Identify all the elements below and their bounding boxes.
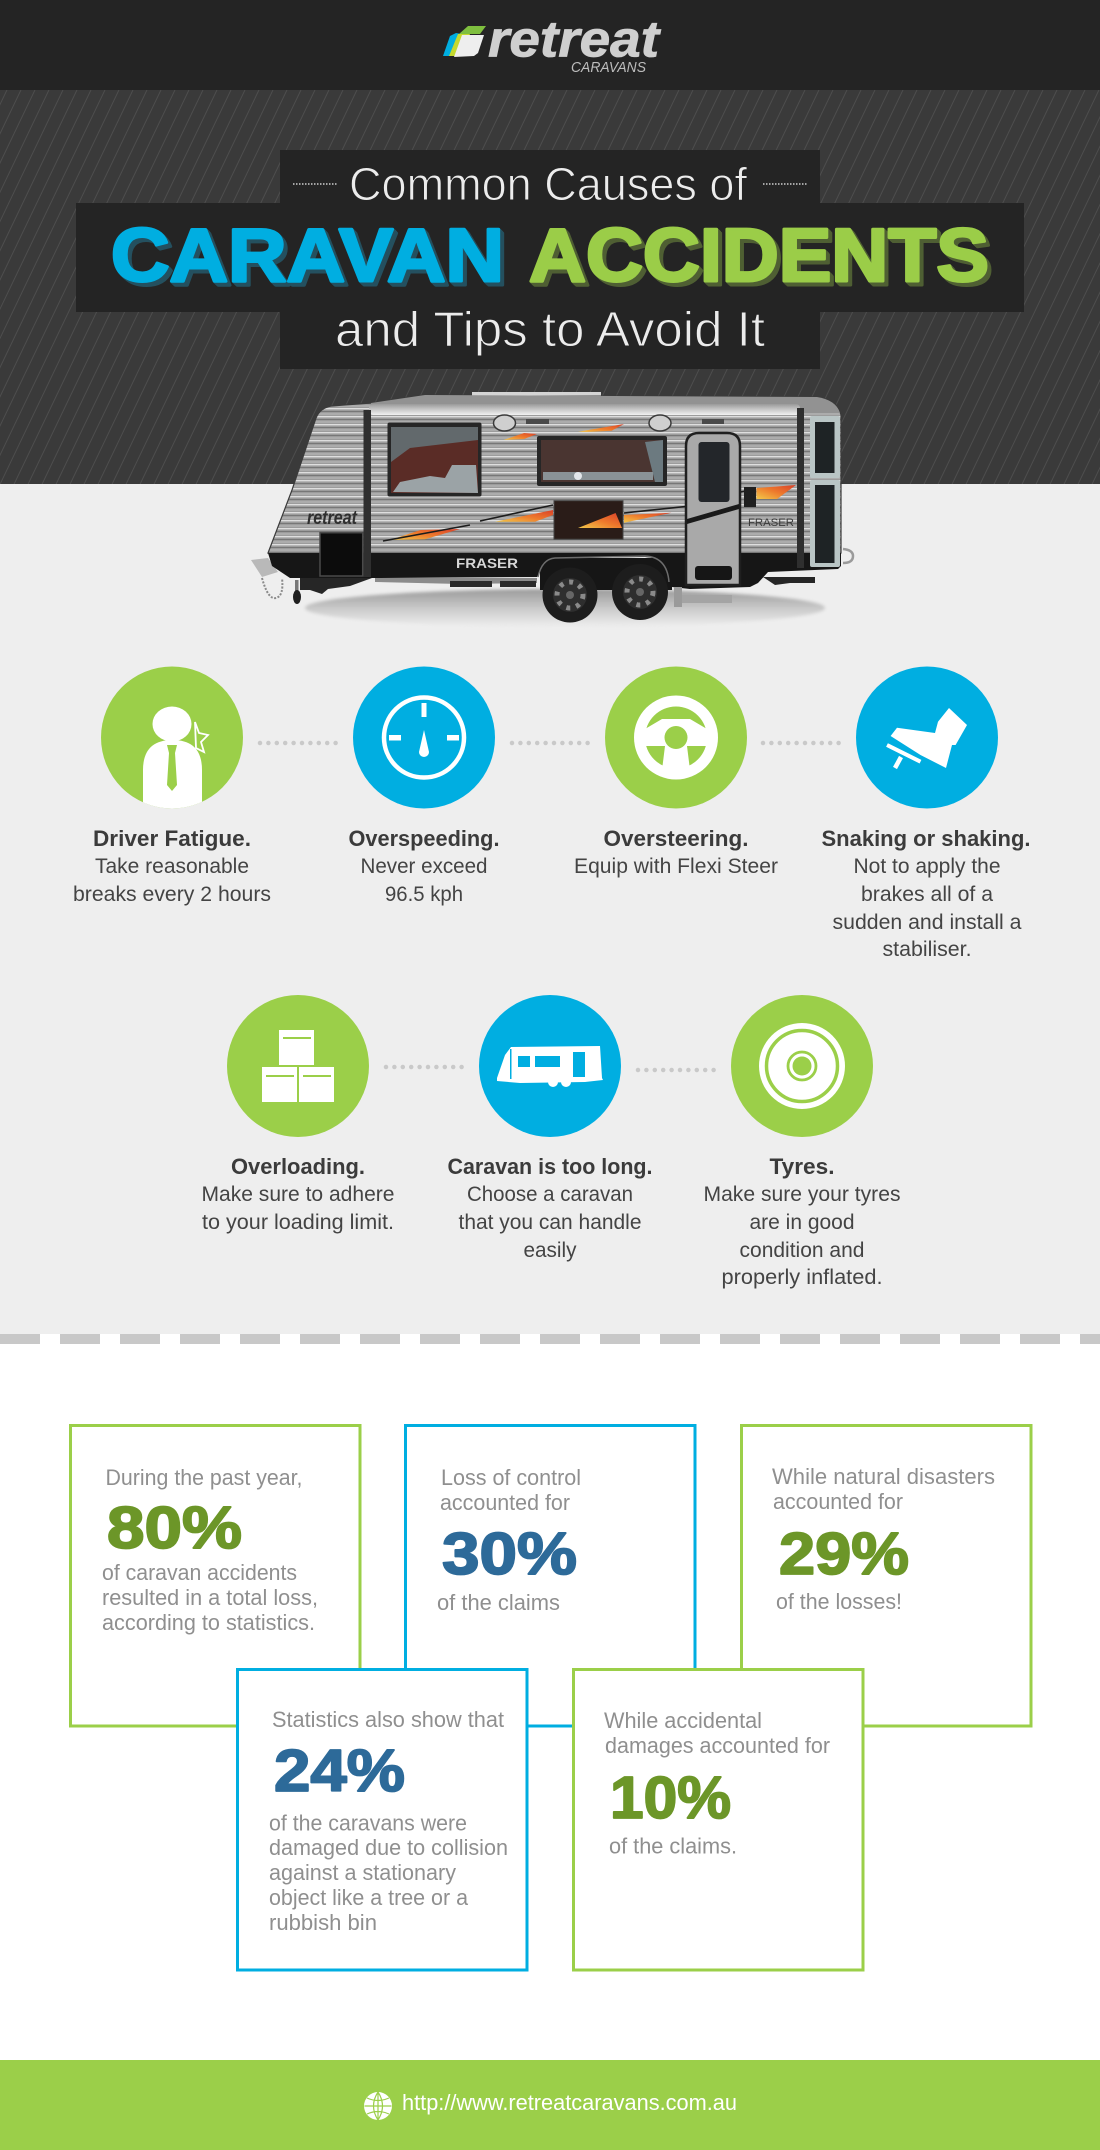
heading: Caravan is too long. <box>448 1154 652 1179</box>
window 1 <box>388 422 482 496</box>
stat: 24%: 24% <box>274 1738 405 1804</box>
stat box: 10% <box>574 1670 863 1970</box>
stat box: 24% <box>238 1670 527 1970</box>
cause: caravan is too long <box>448 995 652 1262</box>
tip text: brakes all of a <box>861 882 993 906</box>
stat box: 30% <box>406 1426 695 1726</box>
tip text: Choose a caravan <box>467 1182 633 1206</box>
stat box: 24%: of the caravans were <box>269 1810 467 1836</box>
icon: caravan silhouette <box>479 995 621 1137</box>
wheel arch trim <box>538 556 669 582</box>
icon: globe <box>364 2092 392 2120</box>
header bar <box>0 0 1100 90</box>
icon: foot on brake pedal <box>856 666 998 808</box>
rear wheel <box>612 564 668 620</box>
heading: Tyres. <box>770 1154 834 1179</box>
caravan body <box>268 395 841 553</box>
tow hitch <box>251 558 537 604</box>
tip text: to your loading limit. <box>202 1210 394 1234</box>
roof details <box>472 392 601 396</box>
caravan illustration <box>251 392 853 627</box>
stat box: 30%: of the claims <box>437 1590 560 1615</box>
tip text: easily <box>524 1238 577 1262</box>
title line 3: and Tips to Avoid It <box>335 303 765 357</box>
roof panel <box>369 395 840 413</box>
lower black skirt <box>268 553 841 589</box>
footer bar <box>0 2060 1100 2150</box>
logo: retreat caravans: CARAVANS <box>571 59 646 76</box>
caravan door <box>686 433 756 585</box>
stat box: 80%: of caravan accidents <box>102 1560 297 1585</box>
tip text: Make sure to adhere <box>202 1182 394 1206</box>
heading: Driver Fatigue. <box>93 826 251 851</box>
stat box: 30%: Loss of control <box>441 1465 581 1490</box>
title panel <box>76 150 1024 369</box>
tip text: breaks every 2 hours <box>73 882 271 906</box>
heading: Oversteering. <box>604 826 748 851</box>
tip text: 96.5 kph <box>385 882 463 906</box>
stat box: 80%: During the past year, <box>106 1465 302 1490</box>
title line 1: Common Causes of <box>349 158 747 210</box>
icon: tyre <box>731 995 873 1137</box>
stat box: 24%: object like a tree or a <box>269 1885 469 1910</box>
ground shadow <box>305 589 825 627</box>
stat box: 24%: damaged due to collision <box>269 1835 508 1860</box>
stat box: 29%: While natural disasters <box>772 1464 995 1489</box>
badge: fraser rear: FRASER <box>748 517 794 529</box>
stat: 10%: 10% <box>610 1765 731 1831</box>
rear compartments <box>810 416 853 567</box>
stat box: 29%: accounted for <box>773 1489 903 1514</box>
wheel well <box>540 558 672 590</box>
connector dots <box>638 1068 714 1072</box>
logo: retreat caravans <box>443 10 661 76</box>
tip text: sudden and install a <box>832 910 1022 934</box>
front wheel <box>542 568 598 622</box>
heading: Snaking or shaking. <box>822 826 1030 851</box>
cause: overloading <box>202 995 394 1234</box>
decals <box>383 424 796 541</box>
connector dots <box>386 1065 462 1069</box>
heading: Overloading. <box>231 1154 365 1179</box>
tip text: Make sure your tyres <box>704 1182 900 1206</box>
tip text: that you can handle <box>458 1210 642 1234</box>
stat box: 29% <box>742 1426 1031 1726</box>
stat box: 30%: accounted for <box>440 1490 570 1515</box>
tip text: stabiliser. <box>882 937 972 961</box>
tip text <box>73 854 271 906</box>
tip text: are in good <box>750 1210 854 1234</box>
centre hatch <box>554 501 623 539</box>
tip text <box>458 1182 642 1262</box>
cause: oversteering <box>574 666 778 878</box>
tip text <box>202 1182 394 1234</box>
tip text: Take reasonable <box>95 854 249 878</box>
connector dots <box>512 741 588 745</box>
rear stabiliser <box>763 577 815 585</box>
icon: stacked boxes <box>227 995 369 1137</box>
tip text <box>360 854 488 906</box>
connector dots <box>260 741 336 745</box>
left awning arm <box>364 410 371 577</box>
step and mudflap <box>674 587 732 607</box>
vents <box>494 415 724 431</box>
tip text <box>832 854 1022 961</box>
stat box: 24%: rubbish bin <box>269 1910 377 1935</box>
website url: http://www.retreatcaravans.com.au <box>402 2090 737 2115</box>
stat: 80%: 80% <box>107 1495 242 1561</box>
stat box: 29%: of the losses! <box>776 1589 902 1614</box>
heading: Overspeeding. <box>348 826 500 851</box>
tip text <box>704 1182 900 1289</box>
icon: steering wheel <box>605 666 747 808</box>
tip text: condition and <box>740 1238 864 1262</box>
stat box: 10%: of the claims. <box>609 1834 737 1858</box>
stat: 30%: 30% <box>442 1521 577 1587</box>
stat: 29%: 29% <box>779 1521 909 1587</box>
cause: snaking or shaking <box>822 666 1030 961</box>
stat box: 24%: Statistics also show that <box>272 1707 504 1732</box>
stat box: 80%: according to statistics. <box>102 1610 315 1635</box>
right awning arm <box>797 408 804 568</box>
cause: overspeeding <box>348 666 500 906</box>
front hatch <box>320 533 363 576</box>
tip text: properly inflated. <box>722 1265 882 1289</box>
stat box: 80% <box>70 1426 360 1726</box>
cause: tyres <box>704 995 900 1289</box>
stat box: 10%: While accidental <box>604 1708 762 1733</box>
light grey section background <box>0 484 1100 1334</box>
title: caravan: CARAVAN <box>111 213 504 297</box>
awning <box>369 404 800 415</box>
icon: speedometer <box>353 666 495 808</box>
badge: fraser side: FRASER <box>456 555 518 571</box>
stat box: 10%: damages accounted for <box>605 1733 830 1758</box>
window 2 <box>537 436 667 486</box>
title: accidents: ACCIDENTS <box>529 213 989 297</box>
hatched dark banner background <box>0 90 1100 484</box>
tip text: Equip with Flexi Steer <box>574 854 778 878</box>
connector dots <box>763 741 839 745</box>
tip text: Never exceed <box>360 854 488 878</box>
cause: driver fatigue <box>73 666 271 906</box>
icon: tired driver <box>101 666 243 812</box>
stat box: 24%: against a stationary <box>269 1860 456 1885</box>
logo: retreat caravans: retreat <box>488 10 661 68</box>
tip text: Not to apply the <box>854 854 1000 878</box>
stat box: 80%: resulted in a total loss, <box>102 1585 318 1610</box>
badge: retreat: retreat <box>307 508 358 529</box>
